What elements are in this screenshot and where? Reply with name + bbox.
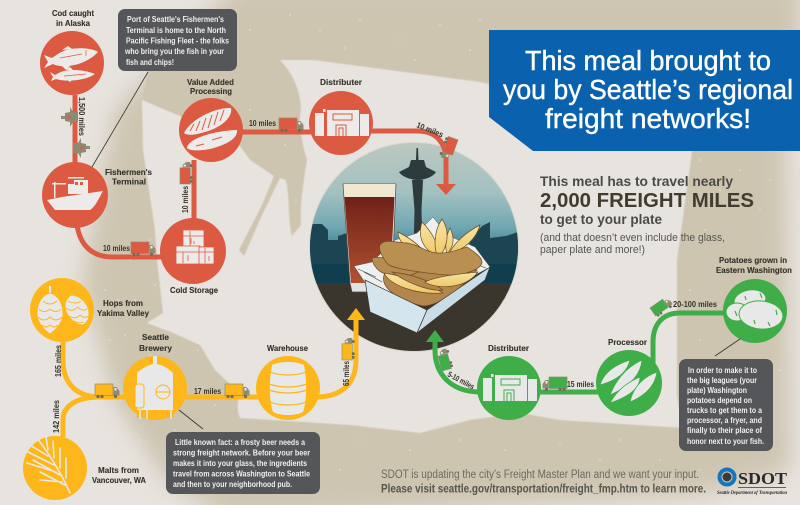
callout: Port of Seattle [92, 9, 237, 167]
headline text: 2,000 freight miles: paper plate and more!) [540, 244, 645, 256]
headline text: 2,000 freight miles: This meal has to travel nearly [540, 174, 733, 189]
headline text: 2,000 freight miles: to get to your plate [540, 212, 662, 227]
label: Vancouver, WA [92, 475, 146, 485]
label: Brewery [139, 343, 172, 353]
callout: Port of Seattle: Pacific Fishing Fleet - the folks [126, 36, 229, 46]
icon: fishing boat [47, 177, 103, 210]
title banner: This meal brought to [525, 45, 771, 76]
trucks and mileage: yellow route: 17 miles [194, 387, 221, 396]
label [716, 255, 792, 275]
label [187, 77, 234, 96]
label: Distributer [320, 77, 363, 87]
icon: barrel [269, 362, 307, 415]
icon: ice cubes [176, 230, 214, 264]
arrow: red into meal [436, 184, 456, 195]
label: Processor [608, 337, 648, 347]
icon: boats and 1,500 miles leg [61, 97, 90, 158]
callout: Port of Seattle: Port of Seattle's Fishermen's [127, 15, 224, 24]
trucks and mileage: red route [103, 118, 458, 256]
label: Malts from [98, 465, 139, 475]
icon: brew tank [135, 356, 173, 419]
callout: potatoes big leagues: potatoes depend on [687, 396, 752, 405]
icon: potato wedges [600, 360, 657, 403]
trucks and mileage: yellow route: 165 miles [54, 345, 63, 377]
label: Seattle [142, 332, 169, 342]
title banner: freight networks! [545, 103, 751, 134]
trucks and mileage: yellow route: 65 miles [342, 361, 351, 386]
stop: cod caught in Alaska [40, 8, 104, 95]
fried fish and fries [372, 219, 482, 306]
trucks and mileage: green route [437, 296, 718, 392]
stop: hops from Yakima Valley [30, 278, 149, 342]
trucks and mileage: red route: 10 miles [103, 244, 130, 253]
label: Cold Storage [170, 285, 218, 295]
stop: Value Added Processing [179, 77, 243, 162]
label [105, 167, 152, 186]
table [310, 283, 518, 353]
center plate scene: beer, fish and chips, Seattle skyline [309, 142, 519, 353]
callout: little known fact: makes it into your glass, the ingredients [173, 459, 307, 468]
label: Eastern Washington [716, 265, 792, 275]
stop: red Distributer [309, 77, 373, 155]
skyline [310, 222, 518, 283]
trucks and mileage: green route: 20-100 miles [673, 300, 718, 309]
footer text: freight master plan: Please visit seattle.gov/transportation/freight_fmp.htm to learn more. [381, 484, 706, 496]
Space Needle [399, 148, 436, 234]
footer text: freight master plan [381, 469, 706, 496]
title banner: you by Seattle’s regional [503, 74, 793, 105]
trucks and mileage: yellow route: 142 miles [52, 399, 61, 433]
icon: potatoes [726, 287, 784, 331]
label: Distributer [488, 343, 530, 353]
callout: potatoes big leagues: trucks to get them to a [687, 406, 762, 415]
label: Hops from [103, 298, 143, 308]
callout: little known fact: and then to your neighborhood pub. [173, 480, 292, 489]
headline text: 2,000 freight miles: (and that doesn’t even include the glass, [540, 232, 725, 244]
callout: potatoes big leagues: In order to make it to [688, 366, 757, 375]
SDOT logo: Seattle Department of Transportation [717, 491, 787, 496]
trucks and mileage: yellow route [52, 338, 355, 433]
callout: little known fact [166, 410, 320, 494]
callout: potatoes big leagues: the big leagues (your [687, 376, 757, 385]
label [97, 298, 149, 318]
footer text: freight master plan: SDOT is updating the city’s Freight Master Plan and we want your input. [381, 469, 699, 481]
label: Warehouse [267, 343, 308, 353]
icon: fish fillets [184, 108, 237, 150]
paper basket [365, 267, 490, 333]
label: Cod caught [52, 8, 94, 18]
label [92, 465, 146, 485]
callout: potatoes big leagues: finally to their place of [687, 426, 762, 435]
trucks and mileage: green route: 15 miles [567, 380, 594, 389]
headline text: 2,000 freight miles: 2,000 FREIGHT MILES [540, 190, 754, 212]
icon: two cod [44, 46, 98, 82]
callout: Port of Seattle: who bring you the fish in your [124, 47, 224, 56]
routes: potato green network [435, 313, 725, 392]
trucks and mileage: green route: 5-10 miles [446, 370, 476, 392]
stop: green Distributer [477, 343, 541, 420]
arrow: yellow into meal [347, 308, 365, 320]
stop: Warehouse [256, 343, 320, 420]
icon: boats and 1,500 miles leg: 1,500 miles [77, 97, 86, 136]
headline text: 2,000 freight miles [540, 174, 754, 256]
routes: fish and chips red network [75, 95, 446, 257]
label: Value Added [187, 77, 234, 87]
callout: potatoes big leagues: plate) Washington [687, 386, 747, 395]
stop: Seattle Brewery [123, 332, 187, 420]
parchment paper [354, 217, 490, 300]
callout: potatoes big leagues: processor, a fryer, and [687, 416, 762, 425]
routes: beer yellow network [63, 318, 356, 437]
icon: hops [37, 286, 89, 334]
beer glass [343, 184, 396, 292]
SDOT logo [717, 469, 788, 496]
trucks and mileage: red route: 10 miles [415, 121, 445, 140]
SDOT logo: SDOT [738, 469, 788, 488]
callout: little known fact: strong freight network. Before your beer [173, 448, 310, 458]
label: in Alaska [56, 18, 90, 28]
label: Processing [190, 86, 232, 96]
stop: Processor [596, 337, 662, 416]
stop: Cold Storage [160, 218, 226, 295]
label: Yakima Valley [97, 308, 149, 318]
icon: warehouse building [315, 109, 369, 136]
label [139, 332, 172, 353]
callout: little known fact: travel from across Washington to Seattle [173, 470, 310, 478]
trucks and mileage: red route: 10 miles [249, 119, 276, 128]
icon: warehouse building [483, 374, 537, 401]
arrow: green into meal [426, 330, 444, 342]
callout: potatoes big leagues [679, 339, 773, 451]
label: Fishermen's [105, 167, 152, 177]
callout: Port of Seattle: fish and chips! [126, 58, 174, 67]
callout: potatoes big leagues: honor next to your fish. [687, 437, 764, 446]
stop: Fishermen's Terminal [42, 162, 152, 228]
callout: little known fact: Little known fact: a frosty beer needs a [175, 438, 305, 447]
label [52, 8, 94, 28]
label: Terminal [112, 176, 146, 186]
label: Potatoes grown in [719, 255, 787, 265]
icon: wheat [27, 437, 70, 493]
trucks and mileage: red route: 10 miles [181, 186, 190, 213]
callout: Port of Seattle: Terminal is home to the North [126, 26, 226, 35]
stop: malts from Vancouver, WA [23, 436, 146, 500]
stop: potatoes grown in Eastern Washington [716, 255, 792, 343]
title banner [489, 30, 800, 151]
